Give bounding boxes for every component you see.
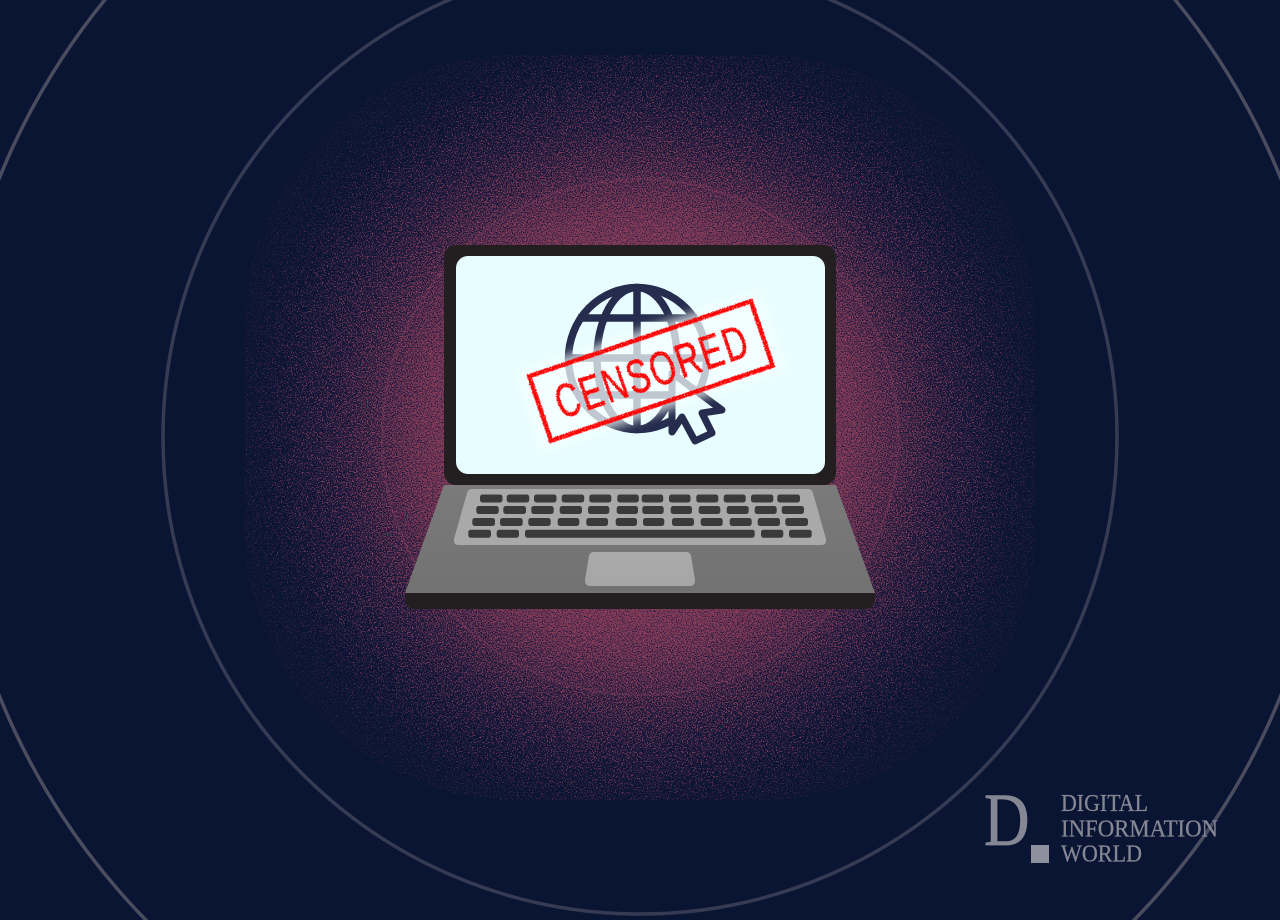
- censored stamp: [529, 301, 773, 441]
- laptop base: [405, 485, 875, 593]
- logo wordmark: [1061, 791, 1218, 868]
- icon: globe: [568, 287, 707, 430]
- keyboard keys: [468, 494, 812, 538]
- laptop lid: [444, 245, 836, 485]
- stamp text: CENSORED: [548, 314, 755, 429]
- keyboard plate: [454, 489, 826, 545]
- logo letter D: D: [984, 778, 1029, 861]
- logo wordmark: DIGITAL: [1061, 791, 1148, 817]
- touchpad: [585, 552, 695, 586]
- logo square: [1031, 845, 1049, 863]
- censored stamp fade: [515, 290, 787, 452]
- icon: cursor: [672, 373, 722, 441]
- logo wordmark: WORLD: [1061, 842, 1142, 868]
- laptop: [405, 245, 875, 609]
- laptop screen: [456, 256, 825, 474]
- logo wordmark: INFORMATION: [1061, 816, 1218, 842]
- laptop base front edge: [405, 593, 875, 609]
- stamp border: [529, 301, 773, 441]
- red noise glow: [245, 55, 1035, 800]
- logo: Digital Information World: [984, 778, 1218, 868]
